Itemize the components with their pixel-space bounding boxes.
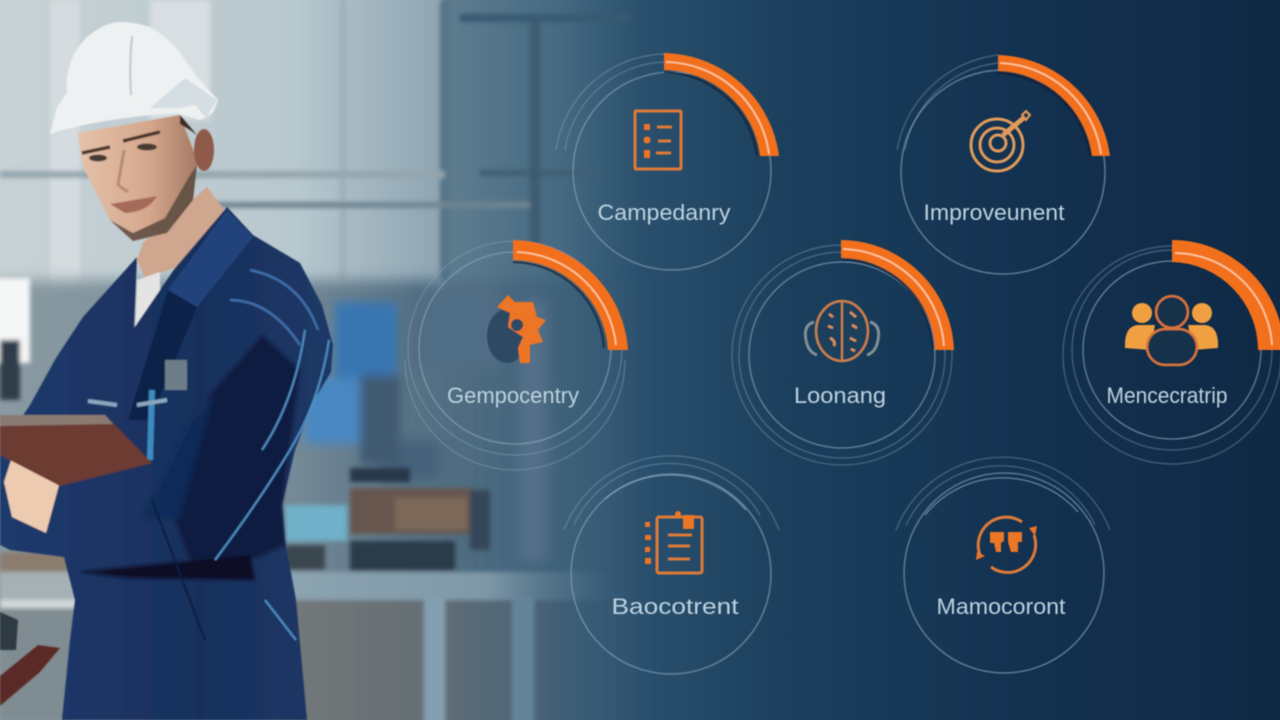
worker: undershirt bbox=[135, 272, 160, 327]
label: Campedanry bbox=[598, 200, 730, 225]
worker: clipboard bbox=[0, 417, 152, 486]
worker: hand bbox=[4, 457, 59, 533]
worker: jacket bbox=[0, 207, 333, 720]
worker: collar bbox=[168, 210, 253, 307]
worker with hard hat and clipboard bbox=[0, 22, 333, 720]
icon: head with gear bbox=[487, 295, 546, 363]
icon: brain bbox=[805, 301, 879, 361]
panel: circle 3 bbox=[405, 240, 628, 470]
panel: circle 5 bbox=[1063, 240, 1280, 464]
orange arc bbox=[998, 55, 1110, 156]
label: Mencecratrip bbox=[1106, 383, 1228, 408]
worker: face bbox=[78, 115, 197, 241]
icon: checklist bbox=[635, 111, 681, 169]
orange arc bbox=[664, 53, 779, 156]
icon: people bbox=[1125, 296, 1218, 365]
orange arc bbox=[841, 240, 954, 350]
label: Loonang bbox=[794, 383, 886, 408]
label: Improveunent bbox=[924, 200, 1064, 225]
panel: circle 7 bbox=[896, 457, 1110, 673]
panel: circle 6 bbox=[564, 456, 779, 674]
icon: clipboard bbox=[645, 511, 702, 573]
worker: mouth bbox=[110, 196, 157, 213]
worker: brows and eyes bbox=[82, 132, 160, 153]
label: Baocotrent bbox=[612, 594, 738, 619]
label: Gempocentry bbox=[447, 383, 579, 408]
label: Mamocoront bbox=[936, 594, 1066, 619]
tools at lower left bbox=[0, 612, 60, 706]
icon: circular arrows with people bbox=[976, 517, 1037, 572]
worker: neck bbox=[137, 187, 227, 278]
icon: target bbox=[971, 111, 1030, 171]
worker: jacket shadows and seams bbox=[78, 335, 300, 580]
worker: hat bbox=[50, 22, 218, 134]
panel: circle 1 bbox=[556, 53, 779, 270]
worker: ear bbox=[194, 129, 214, 171]
orange arc bbox=[1172, 240, 1280, 350]
orange arc bbox=[513, 240, 628, 350]
panel: circle 2 bbox=[897, 55, 1110, 274]
panel: circle 4 bbox=[732, 240, 954, 465]
